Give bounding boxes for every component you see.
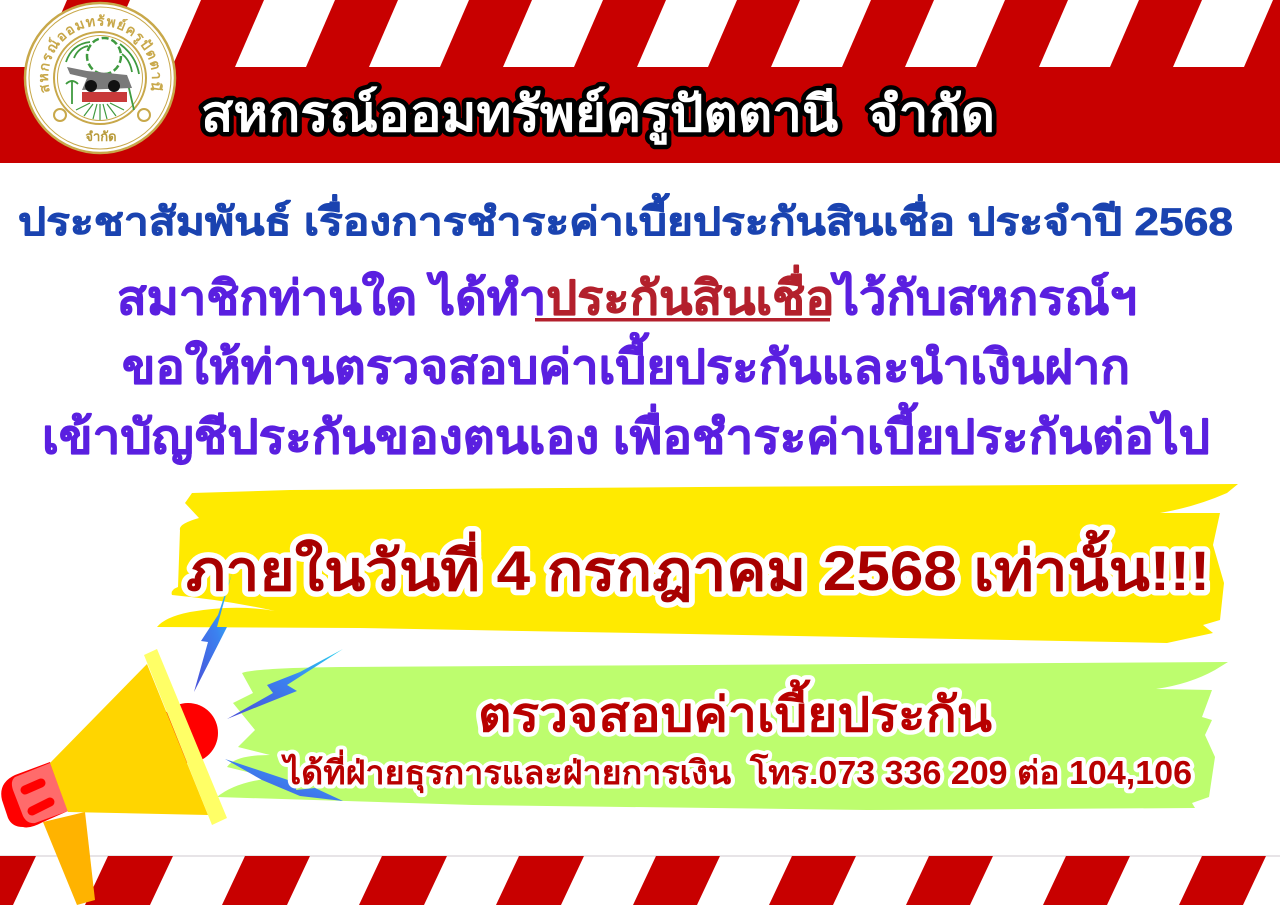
header red band <box>0 67 1280 163</box>
icon: lightning bolt lower <box>225 759 343 801</box>
bottom hazard stripe band <box>0 856 1280 905</box>
body text block <box>42 264 1210 465</box>
logo: cooperative seal <box>24 2 176 154</box>
logo: cooperative seal: จำกัด <box>85 129 117 144</box>
body line 1: สมาชิกท่านใด ได้ทำ ประกันสินเชื่อไว้กับสหกรณ์ฯ <box>117 264 1137 324</box>
icon: lightning bolt middle <box>227 649 343 719</box>
body line 3: เข้าบัญชีประกันของตนเอง เพื่อชำระค่าเบี้ยประกันต่อไป <box>42 402 1210 465</box>
deadline text: ภายในวันที่ 4 กรกฎาคม 2568 เท่านั้น!!! <box>186 530 1210 602</box>
yellow brush banner <box>157 484 1238 643</box>
green brush banner <box>217 662 1228 810</box>
check premium heading: ตรวจสอบค่าเบี้ยประกัน <box>478 679 992 742</box>
announcement heading: ประชาสัมพันธ์ เรื่องการชำระค่าเบี้ยประกันสินเชื่อ ประจำปี 2568 <box>18 193 1233 244</box>
underline: loan insurance <box>535 318 830 322</box>
body line 2: ขอให้ท่านตรวจสอบค่าเบี้ยประกันและนำเงินฝาก <box>122 332 1130 393</box>
title: สหกรณ์ออมทรัพย์ครูปัตตานี จำกัด <box>201 86 995 145</box>
logo: cooperative seal: สหกรณ์ออมทรัพย์ครูปัตตานี <box>40 14 164 93</box>
icon: lightning bolt top <box>194 573 232 692</box>
contact details: ได้ที่ฝ่ายธุรการและฝ่ายการเงิน โทร.073 336 209 ต่อ 104,106 <box>281 749 1192 794</box>
top hazard stripe band <box>38 0 1280 67</box>
icon: megaphone <box>1 649 227 905</box>
